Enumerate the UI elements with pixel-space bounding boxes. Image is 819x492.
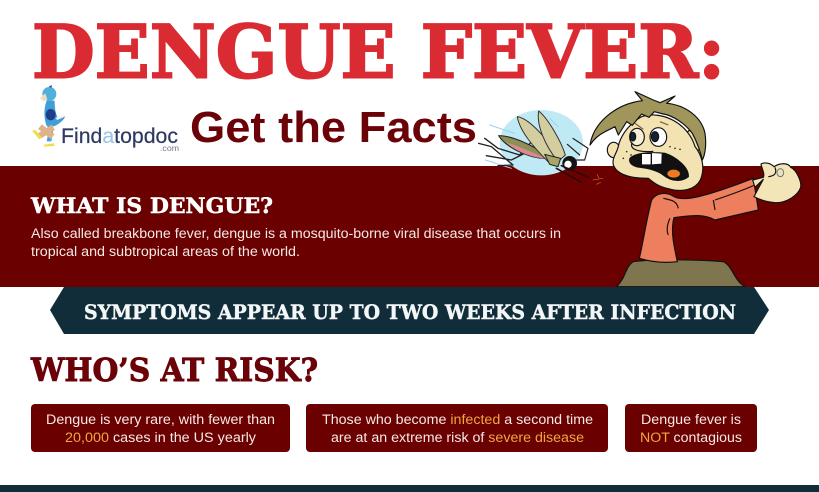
card: not contagious: Dengue fever is	[641, 412, 741, 427]
hand	[753, 163, 801, 203]
left ear	[607, 142, 620, 158]
subtitle: Get the Facts	[190, 103, 477, 152]
face	[613, 115, 703, 190]
tongue	[667, 170, 680, 178]
title: DENGUE FEVER:	[32, 10, 725, 96]
text block: dengue definition: tropical and subtropical areas of the world.	[31, 244, 300, 259]
heading: what is dengue: WHAT IS DENGUE?	[30, 193, 273, 218]
hair	[590, 92, 706, 160]
logo wordmark: Findatopdoc	[61, 125, 178, 148]
text block: dengue definition	[31, 226, 561, 259]
card: second infection: are at an extreme risk of severe disease	[331, 430, 584, 445]
mouth	[630, 153, 688, 180]
footer band	[0, 485, 819, 492]
card: not contagious: NOT contagious	[640, 430, 742, 445]
right ear	[684, 129, 704, 151]
shirt	[639, 178, 758, 262]
illustration: scared boy	[590, 92, 801, 287]
nose	[632, 143, 653, 152]
text block: dengue definition: Also called breakbone fever, dengue is a mosquito-borne viral disease that occurs in	[31, 226, 561, 241]
pants	[617, 260, 745, 287]
heading: who's at risk: WHO’S AT RISK?	[30, 351, 318, 389]
freckles	[623, 147, 680, 158]
logo: Findatopdoc	[32, 85, 179, 153]
ribbon: symptoms	[50, 287, 769, 334]
head	[590, 92, 706, 190]
card: rare cases	[31, 404, 290, 452]
logo .com: .com	[160, 144, 179, 153]
eyes	[630, 128, 644, 146]
ribbon: symptoms: SYMPTOMS APPEAR UP TO TWO WEEKS AFTER INFECTION	[84, 300, 736, 324]
card: second infection	[306, 404, 608, 452]
card: not contagious	[625, 404, 757, 452]
card: rare cases: Dengue is very rare, with fewer than	[46, 412, 275, 427]
card: second infection: Those who become infected a second time	[322, 412, 593, 427]
icon: bird mascot	[32, 85, 65, 147]
teeth	[642, 153, 662, 165]
panel: what is dengue band	[0, 166, 819, 287]
card: rare cases: 20,000 cases in the US yearly	[65, 430, 256, 445]
illustration: mosquito	[479, 110, 603, 184]
body and arm	[617, 178, 758, 287]
eyebrows	[635, 122, 668, 129]
